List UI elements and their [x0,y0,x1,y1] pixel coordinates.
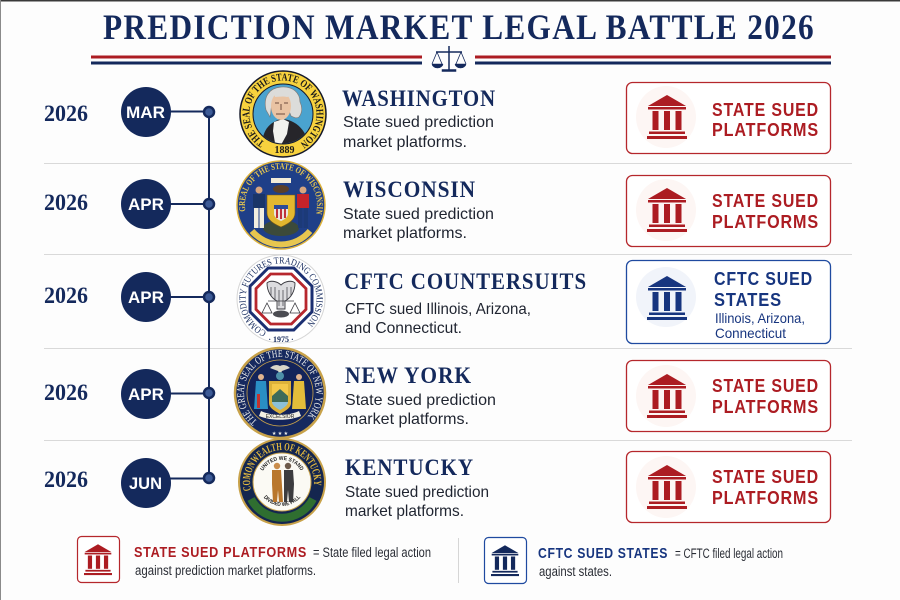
month badge: APR [128,385,164,404]
year: 2026 [44,380,88,405]
title: PREDICTION MARKET LEGAL BATTLE 2026 [103,7,815,47]
state name and description: market platforms. [343,134,467,151]
year: 2026 [44,101,88,126]
month badge: MAR [126,103,165,122]
seal: Kentucky: COMONWEALTH OF KENTUCKY [242,442,322,491]
legend: state sued platforms: = State filed legal action [313,545,431,560]
state name and description: WASHINGTON [342,86,496,111]
row: Kentucky [44,438,832,526]
legend divider [458,538,459,583]
row: New York [44,346,832,439]
seal: New York: THE GREAT SEAL OF THE STATE OF NEW YORK [237,350,323,426]
legend: CFTC sued states: = CFTC filed legal action [675,546,783,561]
icon: blue courthouse [484,538,526,584]
figure right [297,186,309,228]
timeline [147,107,214,483]
title and description: CFTC COUNTERSUITS [344,269,587,294]
month badge [121,458,171,508]
row: CFTC countersuits [44,255,832,344]
title and description: CFTC sued Illinois, Arizona, [345,301,531,318]
status card: STATE SUED [712,99,819,120]
status card: STATE SUED [712,466,819,487]
status card: Illinois, Arizona, [715,310,805,326]
row: Washington [44,70,832,158]
status card: Connecticut [715,325,786,341]
seal: New York: EXCELSIOR [266,414,295,420]
seal: Wisconsin: GREAL OF THE STATE OF WISCONSIN [239,163,323,215]
seal: Kentucky: UNITED WE STAND [260,456,304,470]
state name and description: KENTUCKY [345,455,474,480]
legend: state sued platforms: against prediction market platforms. [135,563,316,578]
month badge: APR [128,195,164,214]
figure left [254,374,268,409]
legend: CFTC sued states [484,538,783,584]
status card: STATES [714,289,782,310]
figure right [292,374,306,409]
state name and description [343,177,494,242]
state name and description: State sued prediction [345,392,496,409]
status card: PLATFORMS [712,211,819,232]
state name and description [345,455,489,520]
row: Wisconsin [44,160,832,250]
seal: New York: ★ ★ ★ [272,431,289,437]
status card [626,260,830,344]
title and description: and Connecticut. [345,320,462,337]
seal: Kentucky [238,438,326,526]
state name and description: NEW YORK [345,363,472,388]
status card: PLATFORMS [712,119,819,140]
status card [626,176,830,246]
status card [626,82,830,154]
month badge: JUN [129,474,162,493]
state name and description: State sued prediction [343,206,494,223]
seal: Washington: 1889 [274,145,294,156]
month badge: APR [128,288,164,307]
year: 2026 [44,190,88,215]
status card: STATE SUED [712,190,819,211]
month badge [121,272,171,322]
seal: Washington: THE SEAL OF THE STATE OF WASHINGTON [242,74,324,149]
state name and description: State sued prediction [343,114,494,131]
legend: CFTC sued states: CFTC SUED STATES [538,545,668,562]
year: 2026 [44,467,88,492]
seal: Kentucky: DIVIDED WE FALL [264,495,300,506]
legend: state sued platforms [78,536,431,582]
state name and description: market platforms. [345,503,464,520]
state name and description: WISCONSIN [343,177,476,202]
month badge [121,179,171,229]
state name and description [345,363,496,428]
seal: CFTC: COMMODITY FUTURES TRADING COMMISSION [239,257,323,336]
row dividers [44,163,852,441]
status card: CFTC SUED [714,268,813,289]
status card [626,360,830,432]
title rule with scales icon [91,46,831,72]
seal: Wisconsin [236,160,326,250]
legend: state sued platforms: STATE SUED PLATFORMS [134,544,307,561]
month badge [121,369,171,419]
status card [626,452,830,522]
state name and description: market platforms. [343,225,467,242]
legend: CFTC sued states: against states. [539,564,612,579]
state name and description [342,86,496,151]
status card: PLATFORMS [712,396,819,417]
status card: STATE SUED [712,375,819,396]
state name and description: State sued prediction [345,484,489,501]
icon: red courthouse [78,536,120,582]
year: 2026 [44,283,88,308]
status card: PLATFORMS [712,487,819,508]
month badge [121,87,171,137]
icon: scales of justice [432,46,466,72]
figure left [253,186,265,228]
state name and description: market platforms. [345,411,469,428]
title and description [344,269,587,337]
seal: CFTC: · 1975 · [268,335,294,344]
